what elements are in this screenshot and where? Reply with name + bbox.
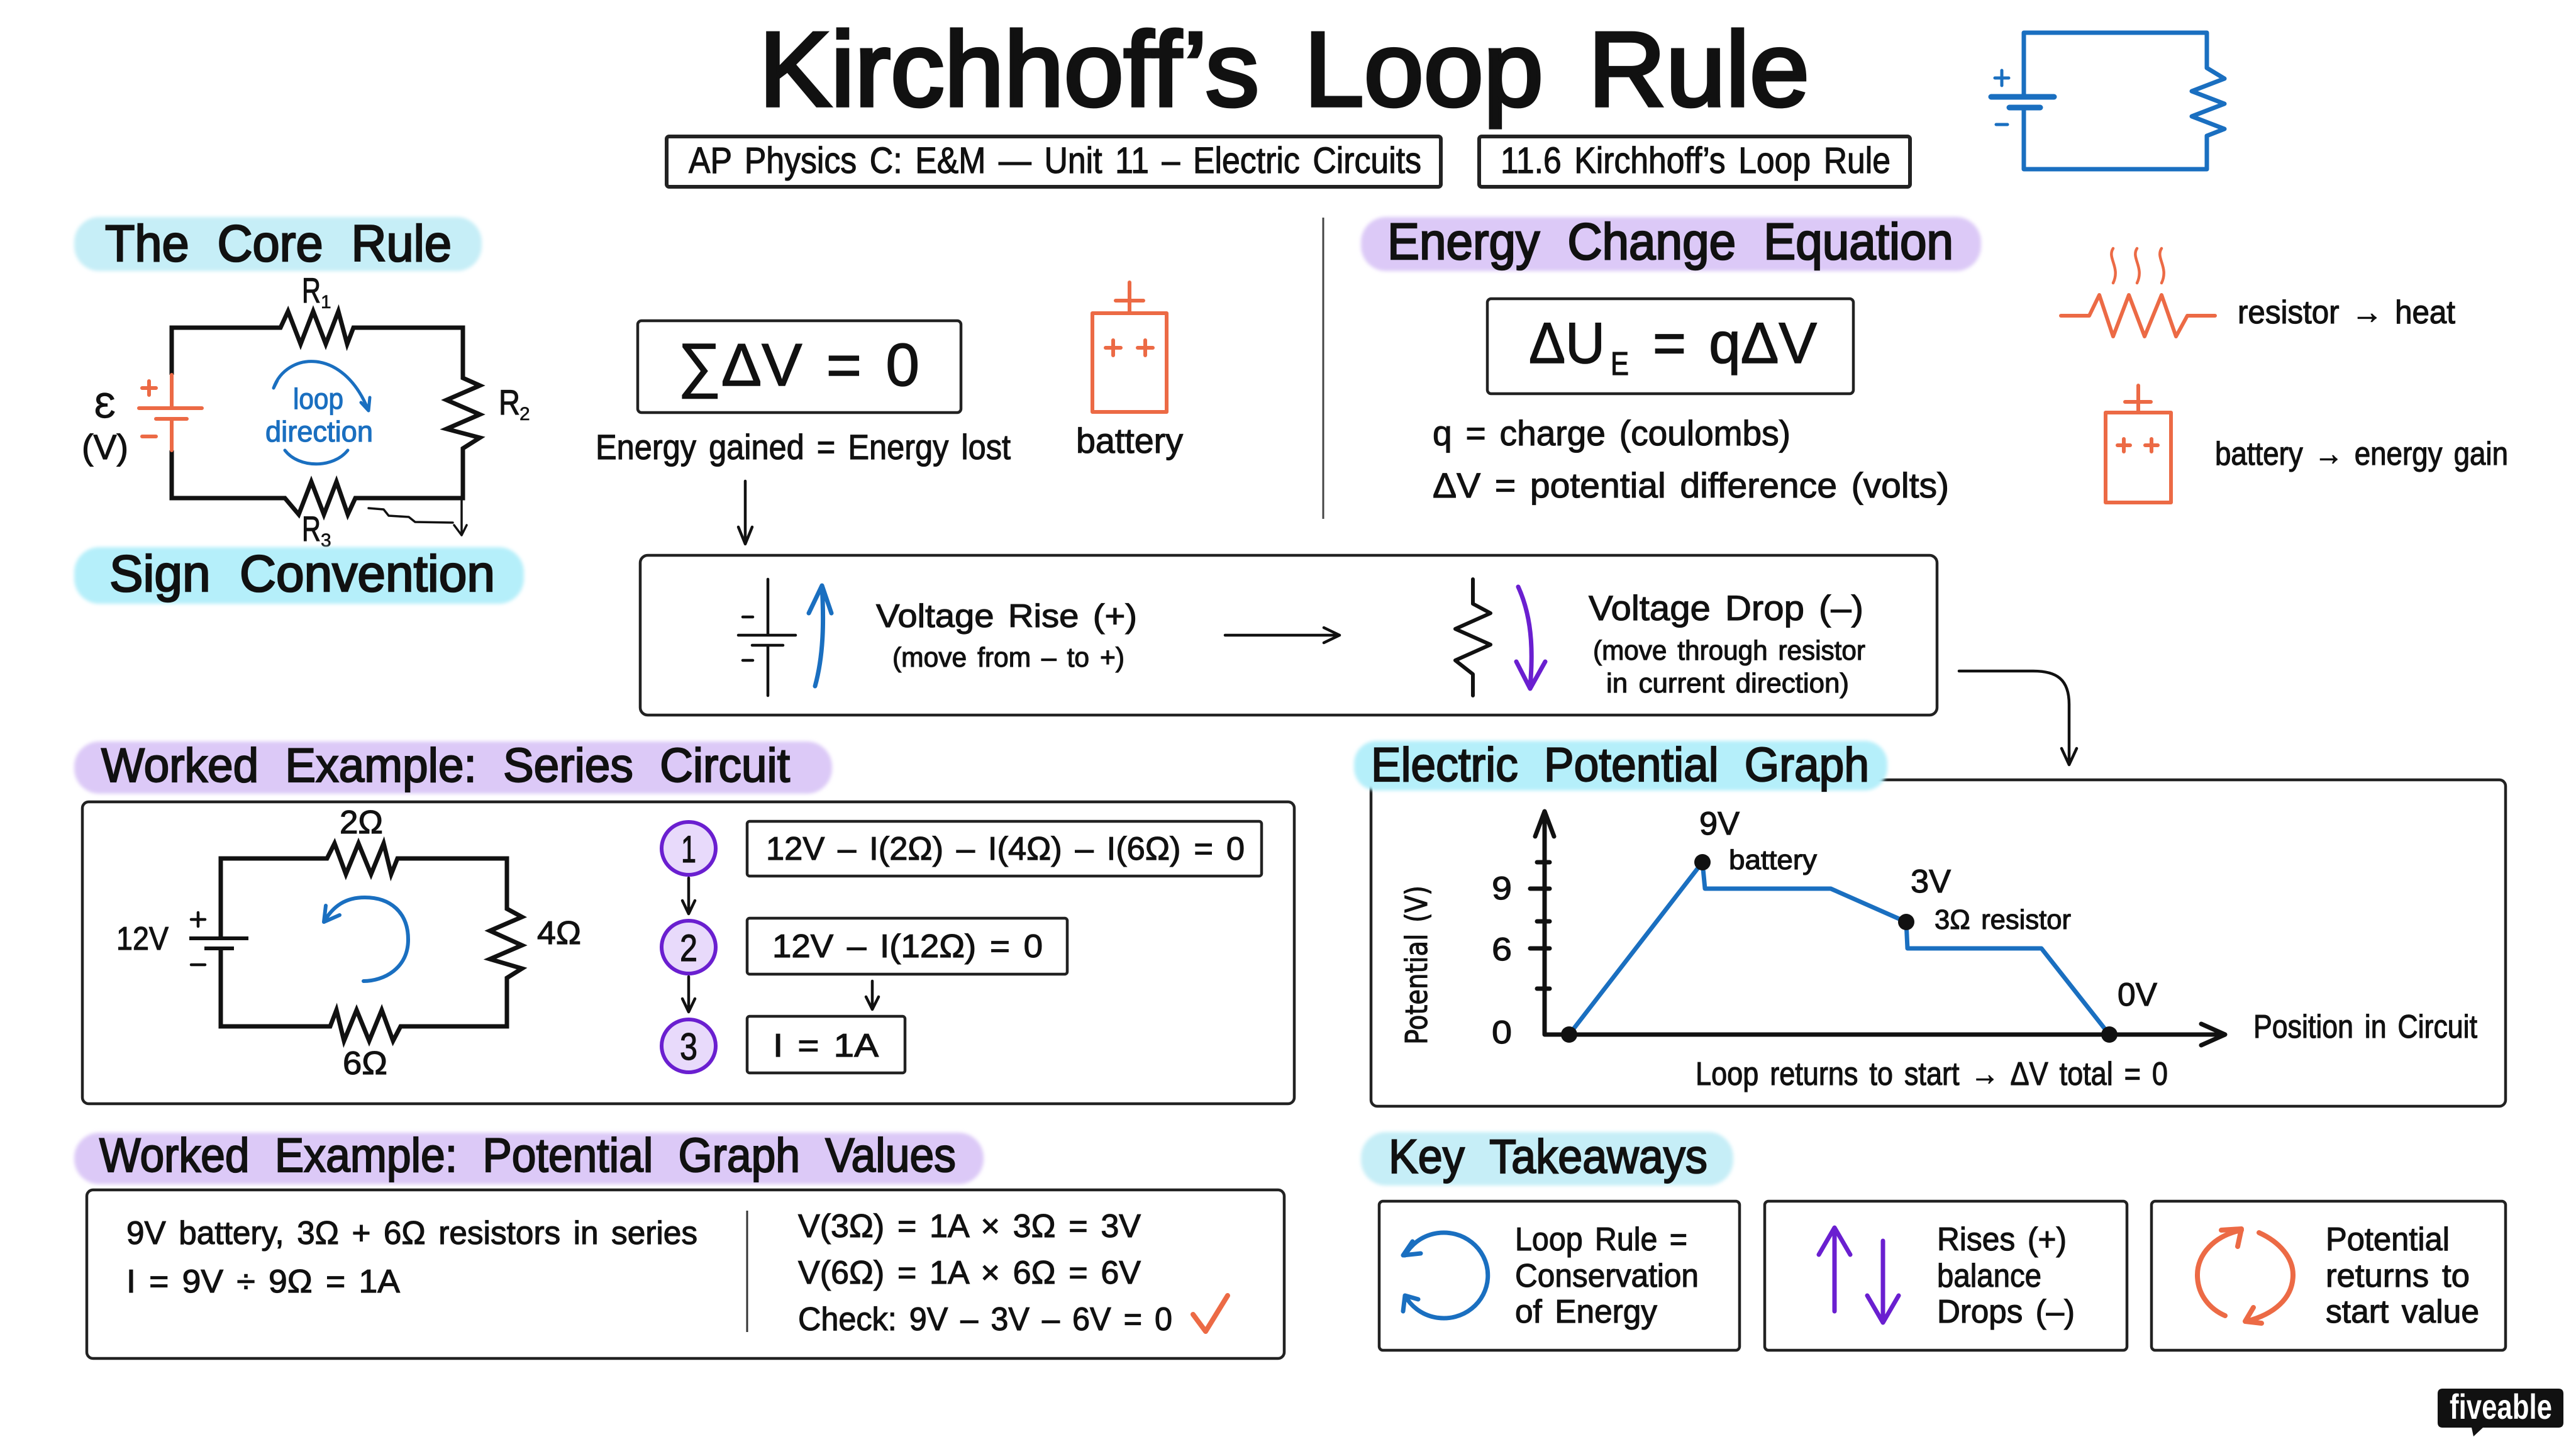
text: variable definitions bbox=[1433, 413, 1949, 505]
equation box: energy change: = qΔV bbox=[1653, 311, 1817, 375]
card: rises and drops: Rises (+) bbox=[1937, 1221, 2067, 1258]
course label: AP Physics C: E&M — Unit 11 – Electric Circuits bbox=[689, 140, 1421, 181]
circuit diagram: 12V bbox=[116, 921, 169, 957]
text: battery energy gain: battery → energy gain bbox=[2215, 436, 2508, 472]
text: given values bbox=[126, 1215, 697, 1300]
arrow bbox=[866, 981, 879, 1009]
topic label: 11.6 Kirchhoff’s Loop Rule bbox=[1501, 140, 1890, 181]
step 2: 2 bbox=[680, 927, 697, 969]
axes: 0 bbox=[1492, 1014, 1512, 1051]
panel: electric potential graph bbox=[1371, 780, 2506, 1106]
step 1 bbox=[662, 821, 1262, 876]
text: given values: I = 9V ÷ 9Ω = 1A bbox=[126, 1263, 400, 1300]
equation box: sum delta V bbox=[638, 321, 961, 413]
potential line bbox=[1561, 854, 2118, 1043]
text: energy gained: Energy gained = Energy lost bbox=[596, 427, 1011, 467]
core rule circuit bbox=[82, 270, 530, 551]
card: loop rule bbox=[1379, 1201, 1740, 1350]
icon: blue circuit bbox=[1991, 33, 2224, 169]
graph labels: 9V bbox=[1699, 806, 1740, 842]
panel: series circuit bbox=[82, 802, 1294, 1104]
icon: battery energy gain bbox=[2106, 386, 2171, 502]
loop direction arrows bbox=[265, 362, 373, 464]
axes: Potential (V) bbox=[1399, 886, 1435, 1045]
loop direction arrows: loop bbox=[293, 382, 343, 415]
arrow bbox=[682, 878, 695, 914]
step 3: 3 bbox=[680, 1026, 697, 1068]
card: rises and drops: balance bbox=[1937, 1258, 2041, 1294]
icon: battery bbox=[1076, 282, 1183, 460]
core rule circuit: 3 bbox=[321, 530, 331, 551]
title: Kirchhoff’s Loop Rule bbox=[759, 10, 1809, 128]
card: potential returns: start value bbox=[2326, 1294, 2479, 1330]
text: voltage rise: (move from – to +) bbox=[892, 642, 1124, 673]
graph labels: Loop returns to start → ΔV total = 0 bbox=[1696, 1056, 2168, 1092]
text: voltage calculations bbox=[798, 1208, 1172, 1338]
icon: battery: battery bbox=[1076, 421, 1183, 460]
heading: the core rule: The Core Rule bbox=[105, 215, 452, 272]
icon: check mark bbox=[1193, 1296, 1228, 1331]
arrow bbox=[682, 977, 695, 1012]
circuit diagram: 4Ω bbox=[537, 915, 581, 952]
icon: resistor heat bbox=[2061, 248, 2215, 336]
arrow: rise to drop bbox=[1225, 628, 1340, 643]
card: loop rule: Conservation bbox=[1515, 1258, 1699, 1294]
axes: 9 bbox=[1492, 870, 1512, 907]
text: voltage calculations: V(3Ω) = 1A × 3Ω = 3V bbox=[798, 1208, 1141, 1245]
text: voltage drop: (move through resistor bbox=[1593, 635, 1865, 666]
core rule circuit: R bbox=[302, 270, 321, 310]
divider bbox=[1322, 218, 1324, 519]
card: loop rule: Loop Rule = bbox=[1515, 1221, 1687, 1258]
heading: sign convention: Sign Convention bbox=[109, 545, 495, 602]
graph labels: Position in Circuit bbox=[2253, 1009, 2477, 1045]
core rule circuit: 2 bbox=[519, 404, 530, 425]
graph labels: 3Ω resistor bbox=[1935, 904, 2071, 935]
text: voltage drop: in current direction) bbox=[1606, 668, 1849, 699]
icon: orange cycle bbox=[2197, 1229, 2293, 1323]
graph labels: battery bbox=[1729, 845, 1817, 875]
text: voltage drop bbox=[1589, 588, 1865, 699]
text: voltage calculations: V(6Ω) = 1A × 6Ω = 6V bbox=[798, 1255, 1141, 1291]
icon: up and down arrows bbox=[1819, 1228, 1899, 1323]
text: resistor heat: resistor → heat bbox=[2238, 294, 2456, 331]
arrow: down to sign box bbox=[738, 481, 752, 544]
loop direction arrows: direction bbox=[265, 415, 373, 448]
battery symbol bbox=[139, 375, 202, 450]
core rule circuit: R bbox=[499, 382, 520, 422]
core rule circuit: (V) bbox=[82, 427, 128, 467]
panel: potential graph values bbox=[87, 1190, 1284, 1358]
icon: resistor drop bbox=[1455, 579, 1545, 696]
step 1: 1 bbox=[681, 828, 696, 870]
axes: 6 bbox=[1492, 931, 1512, 968]
heading: energy change equation: Energy Change Equation bbox=[1387, 213, 1953, 270]
core rule circuit: 1 bbox=[321, 292, 331, 313]
card: loop rule: of Energy bbox=[1515, 1294, 1657, 1330]
card: potential returns: returns to bbox=[2326, 1258, 2470, 1294]
equation box: energy change: ΔU bbox=[1529, 311, 1605, 375]
panel: sign convention bbox=[640, 555, 1937, 715]
equation box: energy change bbox=[1487, 299, 1853, 394]
logo: fiveable bbox=[2438, 1387, 2563, 1436]
heading: series circuit: Worked Example: Series Circuit bbox=[101, 739, 790, 792]
heading: key takeaways: Key Takeaways bbox=[1389, 1130, 1707, 1184]
heading: electric potential graph: Electric Potential Graph bbox=[1371, 738, 1869, 792]
text: voltage calculations: Check: 9V – 3V – 6V = 0 bbox=[798, 1301, 1172, 1338]
heading: potential graph values: Worked Example: Potential Graph Values bbox=[99, 1129, 956, 1182]
step 1: 12V – I(2Ω) – I(4Ω) – I(6Ω) = 0 bbox=[766, 831, 1245, 867]
step 3: I = 1A bbox=[773, 1028, 879, 1064]
core rule circuit: R bbox=[302, 509, 321, 548]
equation box: energy change: E bbox=[1611, 346, 1629, 382]
arrow: elbow to graph bbox=[1959, 671, 2077, 765]
step 2 bbox=[662, 918, 1067, 974]
graph labels bbox=[1696, 806, 2477, 1092]
step 3 bbox=[662, 1016, 905, 1073]
text: voltage drop: Voltage Drop (–) bbox=[1589, 588, 1863, 628]
card: potential returns: Potential bbox=[2326, 1221, 2450, 1258]
text: variable definitions: ΔV = potential difference (volts) bbox=[1433, 465, 1949, 505]
text: voltage rise bbox=[876, 598, 1137, 673]
circuit diagram: 6Ω bbox=[343, 1045, 387, 1082]
card: rises and drops bbox=[1765, 1201, 2127, 1350]
text: variable definitions: q = charge (coulombs) bbox=[1433, 413, 1790, 453]
card: rises and drops: Drops (–) bbox=[1937, 1294, 2075, 1330]
step 2: 12V – I(12Ω) = 0 bbox=[772, 928, 1043, 965]
axes bbox=[1399, 811, 2225, 1051]
card: potential returns bbox=[2151, 1201, 2506, 1350]
text: given values: 9V battery, 3Ω + 6Ω resistors in series bbox=[126, 1215, 697, 1252]
core rule circuit: Ɛ bbox=[94, 386, 116, 425]
text: voltage rise: Voltage Rise (+) bbox=[876, 598, 1137, 635]
graph labels: 0V bbox=[2118, 977, 2157, 1013]
icon: battery rise bbox=[738, 579, 831, 696]
circuit diagram: 2Ω bbox=[340, 804, 383, 841]
icon: blue loop bbox=[1403, 1233, 1488, 1318]
circuit diagram bbox=[116, 804, 581, 1082]
graph labels: 3V bbox=[1911, 863, 1951, 900]
equation box: sum delta V: ∑ΔV = 0 bbox=[678, 331, 919, 399]
